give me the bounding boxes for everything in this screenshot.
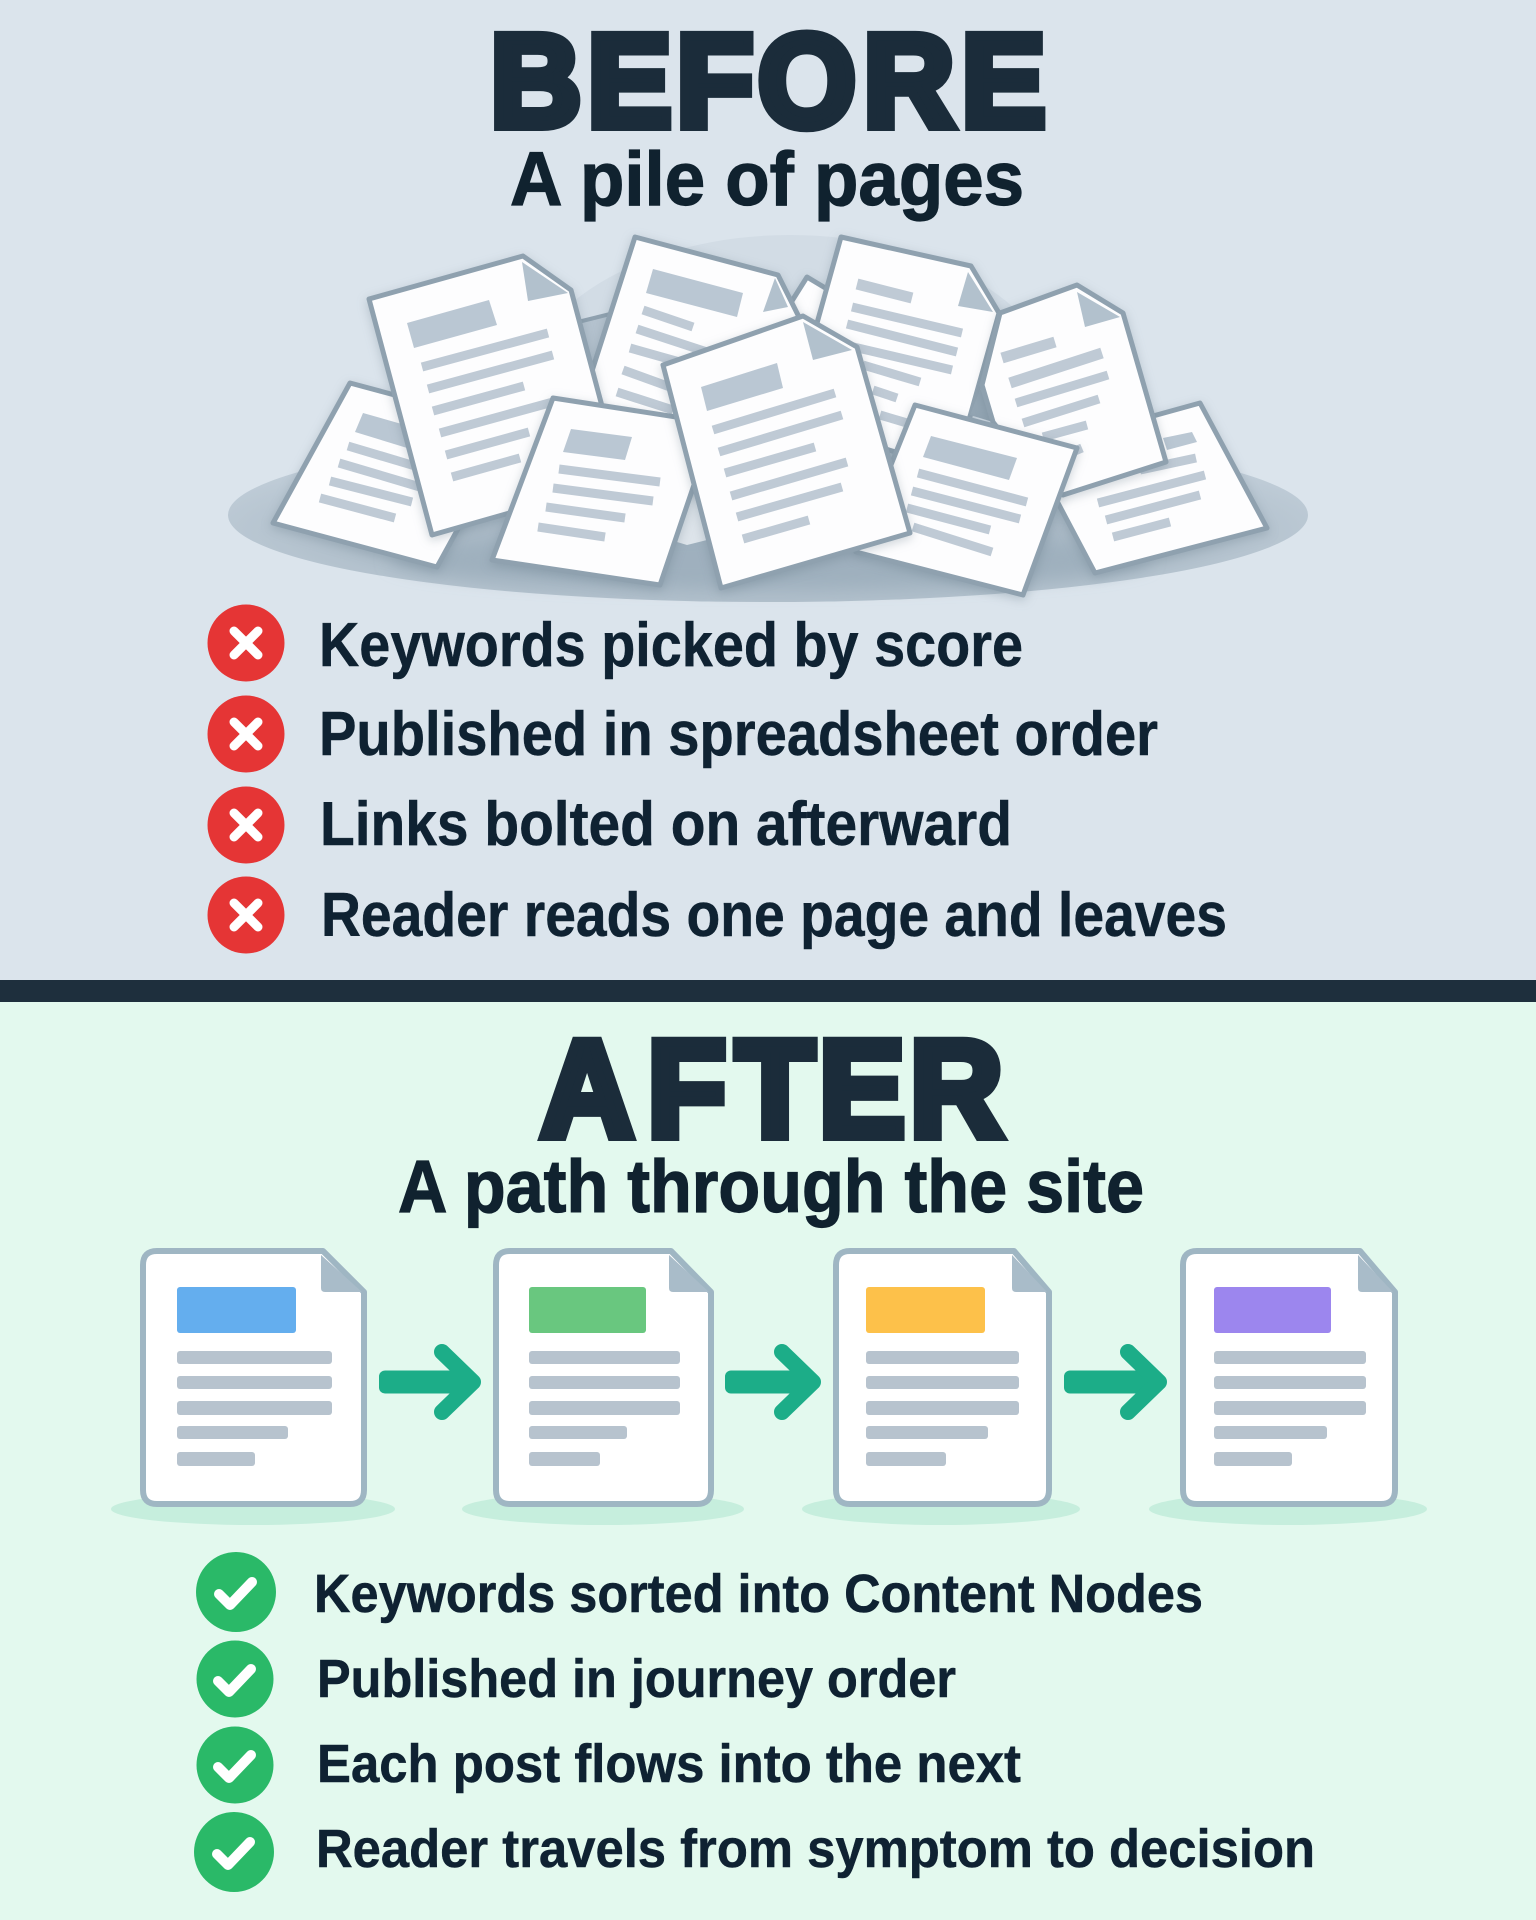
- subtitle: a pile of pages: A pile of pages: [510, 137, 1024, 222]
- text: reader travels from symptom to decision: Reader travels from symptom to decision: [316, 1819, 1315, 1879]
- page: far left: [273, 383, 514, 567]
- document 1: blue: [111, 1251, 395, 1525]
- title: BEFORE: BEFORE: [490, 9, 1046, 155]
- text: each post flows into the next: Each post flows into the next: [317, 1734, 1021, 1794]
- panel: after: [0, 1002, 1536, 1920]
- document 4: purple: [1149, 1251, 1427, 1525]
- panel: before: [0, 0, 1536, 980]
- arrow 1: [379, 1352, 473, 1412]
- page: top centre-right: [790, 237, 999, 470]
- icon: green check 3: [196, 1726, 274, 1804]
- text: links bolted on afterward: Links bolted on afterward: [320, 790, 1012, 859]
- text: published in journey order: Published in journey order: [317, 1649, 956, 1709]
- icon: red cross 4: [208, 876, 284, 954]
- list: after benefits: [194, 1552, 1315, 1892]
- icon: red cross 3: [208, 786, 284, 864]
- document 3: amber: [802, 1251, 1080, 1525]
- page: front left: [492, 398, 715, 585]
- arrow 2: [725, 1352, 813, 1412]
- divider bar: [0, 980, 1536, 1002]
- icon: green check 1: [196, 1552, 276, 1632]
- document 2: green: [462, 1251, 744, 1525]
- text: reader reads one page and leaves: Reader reads one page and leaves: [321, 881, 1227, 950]
- subtitle: a path through the site: A path through the site: [398, 1145, 1144, 1228]
- page: front right: [856, 405, 1077, 595]
- text: keywords sorted into content nodes: Keywords sorted into Content Nodes: [314, 1564, 1203, 1624]
- text: keywords picked by score: Keywords picked by score: [319, 611, 1023, 680]
- flow: four documents with arrows: [111, 1251, 1427, 1525]
- text: published in spreadsheet order: Published in spreadsheet order: [319, 700, 1158, 769]
- page: front centre: [663, 316, 910, 588]
- icon: red cross 1: [208, 604, 284, 682]
- illustration: pile of pages: [228, 235, 1308, 602]
- page: large left: [369, 256, 622, 535]
- list: before problems: [208, 604, 1227, 954]
- page: far right: [1030, 403, 1267, 573]
- icon: green check 4: [194, 1812, 274, 1892]
- title: AFTER: AFTER: [541, 1013, 1003, 1166]
- arrow 3: [1064, 1352, 1159, 1412]
- page: top centre-left: [565, 237, 803, 505]
- icon: green check 2: [196, 1640, 274, 1718]
- icon: red cross 2: [208, 696, 284, 772]
- page: right tall: [970, 285, 1166, 495]
